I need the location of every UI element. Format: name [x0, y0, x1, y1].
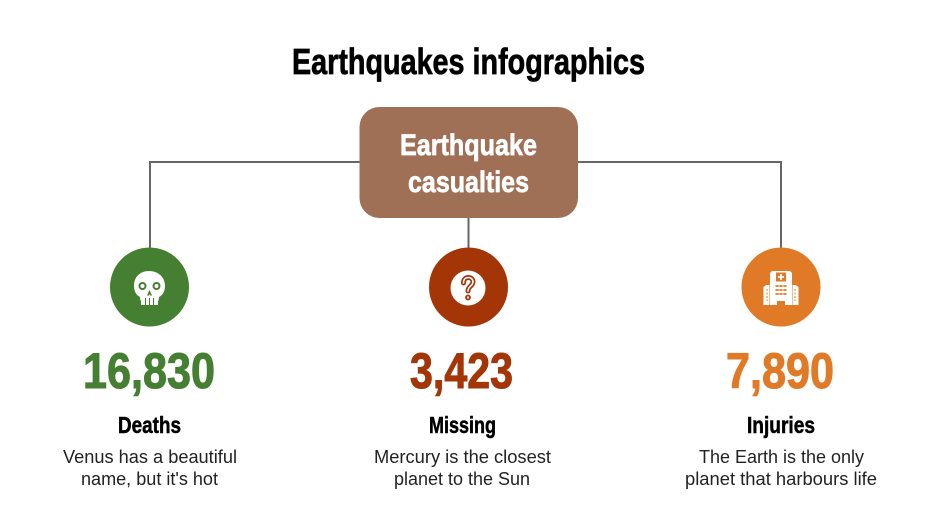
description: deaths: Venus has a beautiful	[63, 447, 237, 467]
number: injuries: 7,890	[726, 343, 834, 399]
panel: deaths	[63, 248, 237, 489]
description: missing: Mercury is the closest	[374, 447, 551, 467]
icon: hospital	[742, 248, 820, 326]
connector lines	[150, 162, 781, 250]
description: missing: planet to the Sun	[394, 469, 530, 489]
central box: Earthquake casualties	[360, 107, 578, 218]
label: deaths: Deaths	[118, 412, 181, 438]
description: injuries: planet that harbours life	[685, 469, 877, 489]
description: deaths: name, but it's hot	[81, 469, 218, 489]
panel: missing	[374, 248, 551, 489]
description: injuries	[685, 447, 877, 489]
icon: skull	[110, 248, 189, 326]
label: injuries: Injuries	[747, 412, 815, 438]
central box: Earthquake casualties: Earthquake	[400, 129, 537, 162]
icon: question mark	[429, 248, 508, 326]
label: missing: Missing	[429, 412, 496, 438]
number: missing: 3,423	[410, 343, 513, 399]
central box: Earthquake casualties: casualties	[408, 166, 529, 199]
description: deaths	[63, 447, 237, 489]
title: Earthquakes infographics	[292, 41, 645, 82]
number: deaths: 16,830	[83, 343, 215, 399]
description: missing	[374, 447, 551, 489]
description: injuries: The Earth is the only	[699, 447, 864, 467]
panel: injuries	[685, 248, 877, 489]
